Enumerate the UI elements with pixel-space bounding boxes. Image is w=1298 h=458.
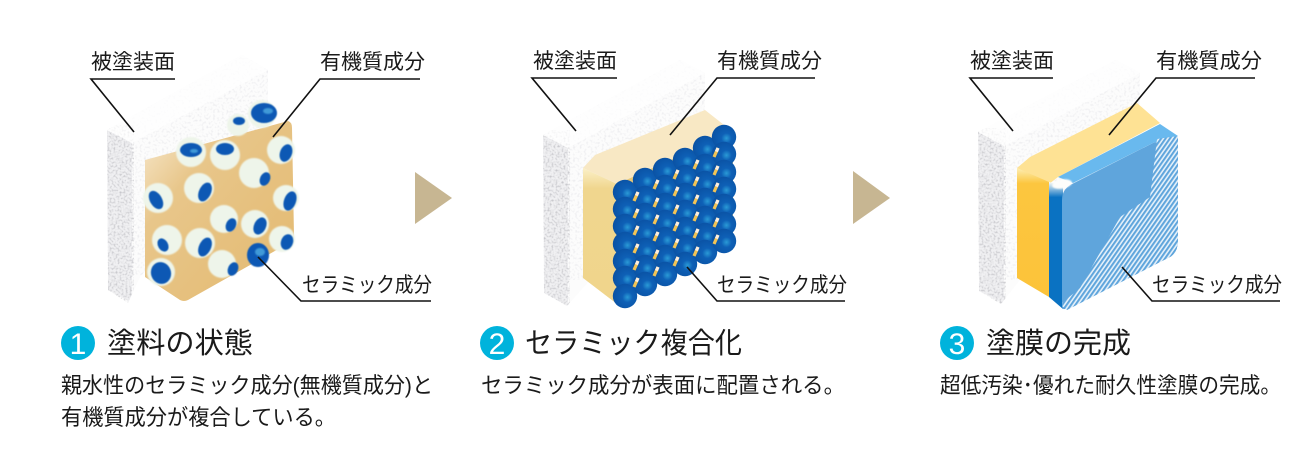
leader: ceramic component 2 [687,267,845,301]
body text: ceramic composite: セラミック成分が表面に配置される。 [481,373,845,398]
leader: organic component 3 [1109,78,1255,135]
label: ceramic component 2: セラミック成分 [717,274,847,297]
number badge 2: 2 [489,328,505,361]
panel: film completion [940,50,1282,398]
number badge 1: 1 [70,328,86,361]
leader: coated surface 2 [532,78,617,131]
illustration: ceramic particles [143,100,299,287]
leader: organic component 2 [670,78,815,135]
heading: ceramic composite: セラミック複合化 [525,327,742,360]
label: ceramic component 1: セラミック成分 [302,274,432,297]
illustration: blue ceramic film [1049,124,1178,310]
number badge 3: 3 [949,328,965,361]
label: coated surface 3: 被塗装面 [970,50,1054,73]
illustration: wall surface 3 [978,76,1140,304]
leader: coated surface 1 [91,79,175,132]
body text: paint state: 有機質成分が複合している。 [61,405,336,430]
illustration: ceramic spheres grid [613,125,736,308]
body text: paint state: 親水性のセラミック成分(無機質成分)と [61,373,433,398]
label: organic component 2: 有機質成分 [717,50,822,73]
label: organic component 1: 有機質成分 [320,51,425,74]
heading: paint state: 塗料の状態 [107,327,253,360]
body text: film completion: 超低汚染･優れた耐久性塗膜の完成。 [940,373,1281,398]
leader: ceramic component 3 [1122,267,1280,301]
leader: organic component 1 [273,79,420,137]
label: coated surface 2: 被塗装面 [533,50,617,73]
illustration: organic coating layer [145,121,294,301]
illustration: wall surface 1 [107,70,268,303]
arrow: step 2 to 3 [853,171,890,224]
panel: ceramic composite [480,50,847,398]
number badge 1 [61,326,95,361]
label: organic component 3: 有機質成分 [1156,50,1262,73]
heading: film completion: 塗膜の完成 [986,327,1131,360]
body text: paint state [61,373,433,430]
illustration: wall surface 2 [543,75,705,306]
panel: paint state [61,50,433,430]
arrow: step 1 to 2 [415,172,452,224]
illustration: yellow organic layer [1017,103,1160,297]
illustration: organic layer with top and side [583,110,733,304]
leader: coated surface 3 [970,78,1053,131]
label: coated surface 1: 被塗装面 [91,51,175,74]
number badge 3 [940,326,974,361]
leader: ceramic component 1 [258,257,431,301]
number badge 2 [480,326,514,361]
label: ceramic component 3: セラミック成分 [1152,274,1282,297]
